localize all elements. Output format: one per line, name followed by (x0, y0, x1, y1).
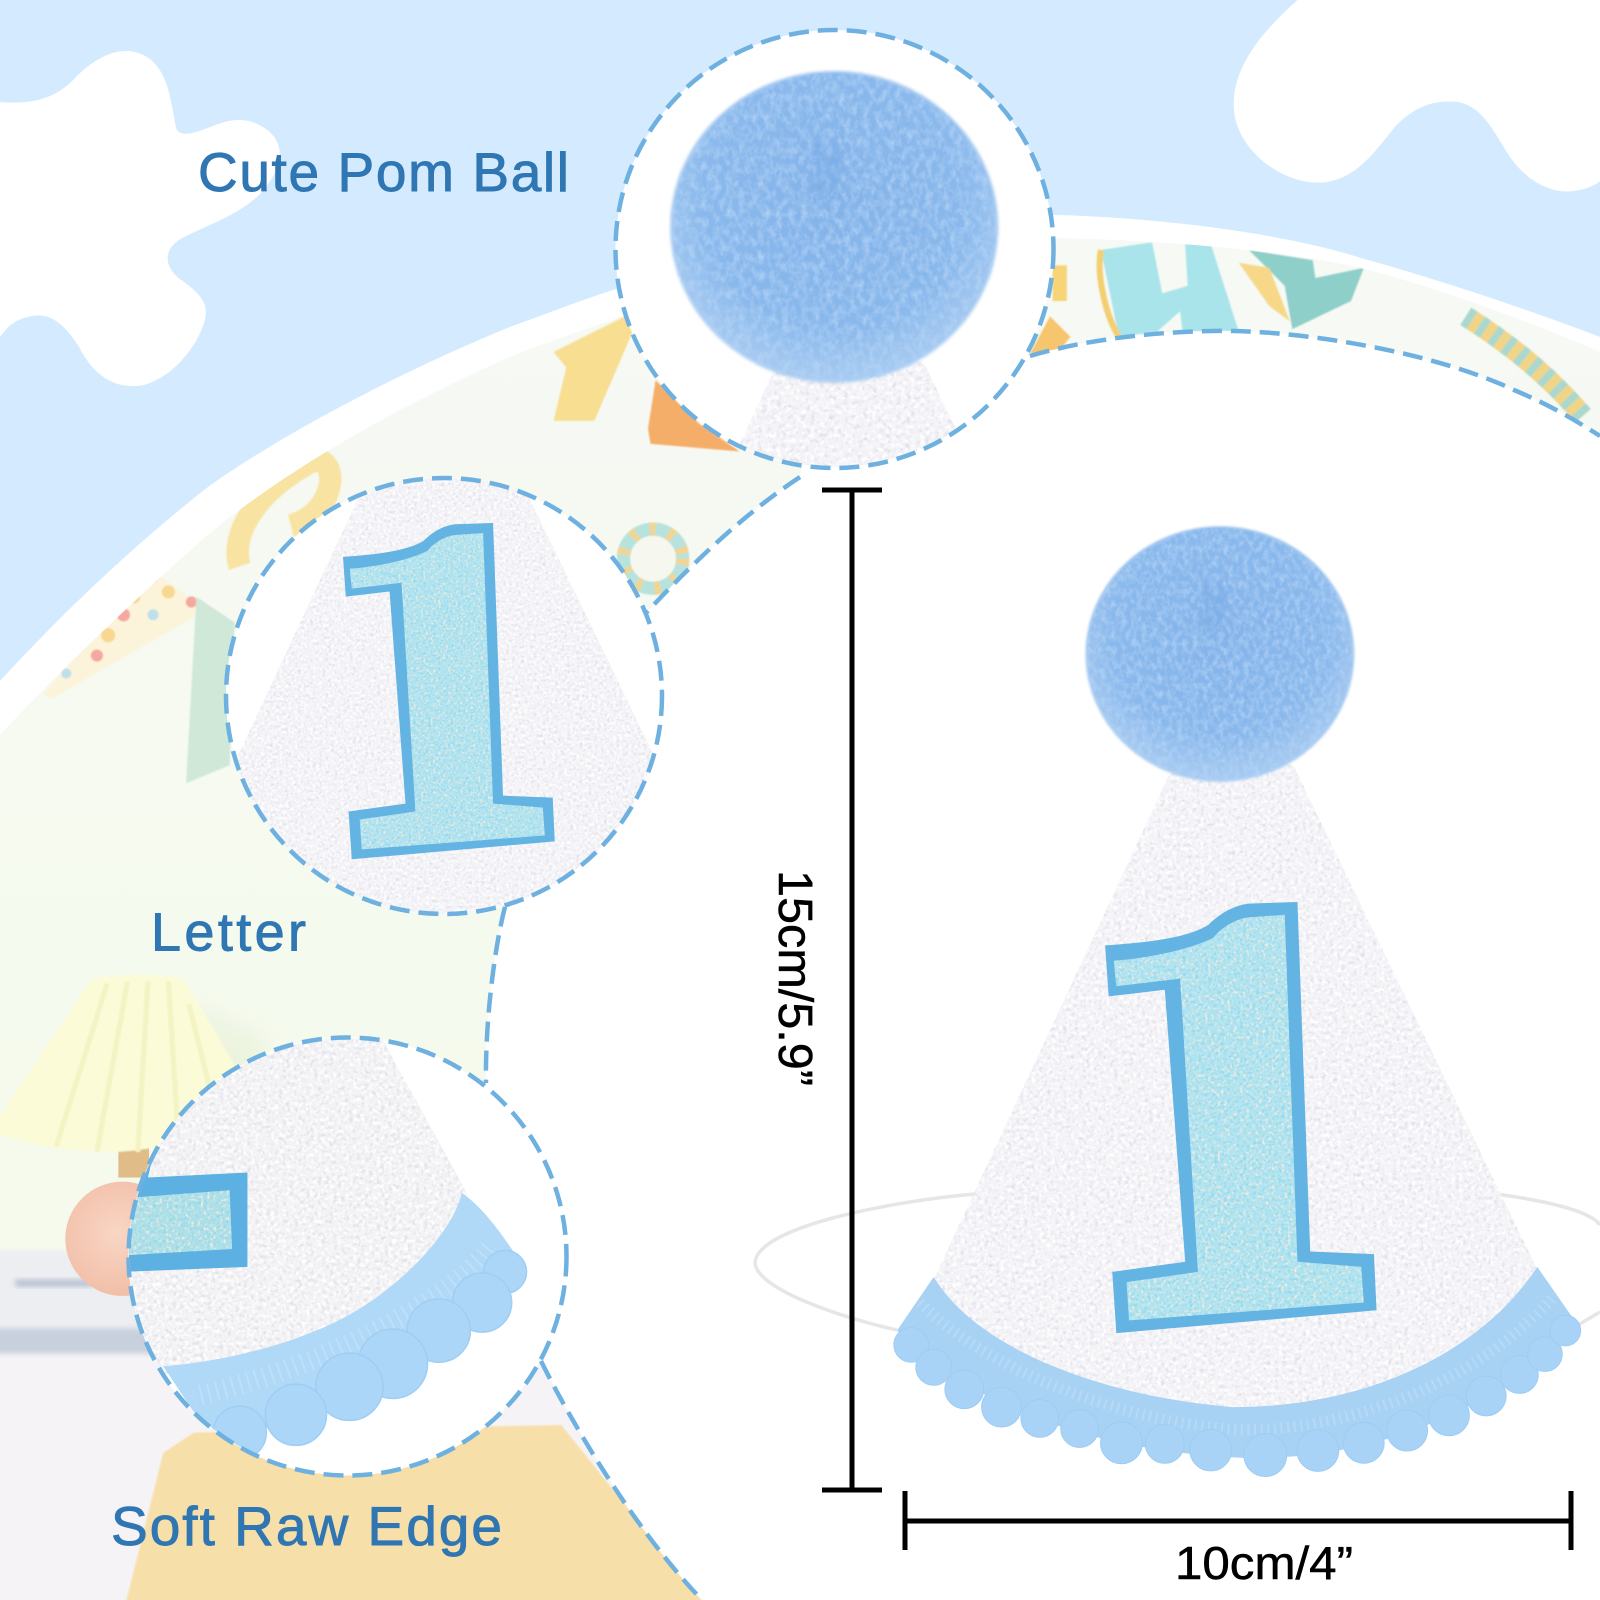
width label: 10cm/4” (1175, 1537, 1353, 1589)
main hat (894, 527, 1581, 1477)
label: cute pom ball: Cute Pom Ball (198, 141, 569, 203)
yellow letter (554, 316, 633, 421)
yellow letter p (238, 459, 330, 566)
dark pen (15, 1280, 92, 1287)
green pennant (186, 597, 235, 783)
label: letter: Letter (151, 902, 306, 962)
teal flower (623, 529, 683, 588)
dashed ring (616, 30, 1054, 468)
number patch zoom (178, 230, 714, 971)
yellow scallop (1053, 265, 1067, 301)
lamp base (65, 1182, 138, 1296)
circle: pom ball detail (613, 28, 1056, 470)
pom ball zoom (437, 71, 1274, 1230)
heart pennant (43, 568, 207, 699)
trim stitching (194, 1249, 490, 1397)
circle background (128, 1038, 566, 1476)
lamp shade (0, 975, 245, 1152)
cloud right (1234, 0, 1600, 191)
grey stripe (0, 1328, 153, 1354)
lamp neck (118, 1147, 149, 1178)
trim band (163, 1193, 526, 1443)
dark teal letter (1239, 250, 1364, 329)
cloth (0, 1256, 136, 1323)
desk (0, 1356, 614, 1600)
lamp and table scene (0, 975, 714, 1600)
bunting decorations right (1030, 242, 1583, 416)
dashed ring (226, 478, 662, 914)
yellow table (122, 1425, 714, 1600)
felt slab (122, 1155, 247, 1272)
cloud left (0, 51, 280, 386)
bunting decorations left (43, 316, 740, 783)
teal letter h (1100, 242, 1239, 337)
dashed outlines (486, 331, 1600, 1600)
small orange pennant (1030, 316, 1070, 355)
cone (102, 1024, 467, 1377)
pom balls (213, 1251, 527, 1459)
trim zoom (102, 1024, 527, 1459)
height label: 15cm/5.9” (768, 870, 821, 1086)
orange pennant (648, 380, 740, 452)
dashed ring (128, 1038, 566, 1476)
height dimension line (822, 490, 882, 1490)
circle: soft raw edge detail (102, 1024, 567, 1476)
circle background (226, 478, 662, 914)
label: soft raw edge: Soft Raw Edge (111, 1495, 502, 1557)
elastic string (755, 1194, 1600, 1330)
width dimension line (905, 1491, 1571, 1550)
striped letter (1466, 316, 1583, 416)
main white area with dashed edge (347, 249, 1600, 1600)
circle: letter detail (224, 476, 664, 916)
white region (347, 249, 1600, 1600)
circle background (616, 30, 1054, 468)
sequin slab (128, 1190, 232, 1255)
lamp wall shadow (208, 1016, 263, 1066)
